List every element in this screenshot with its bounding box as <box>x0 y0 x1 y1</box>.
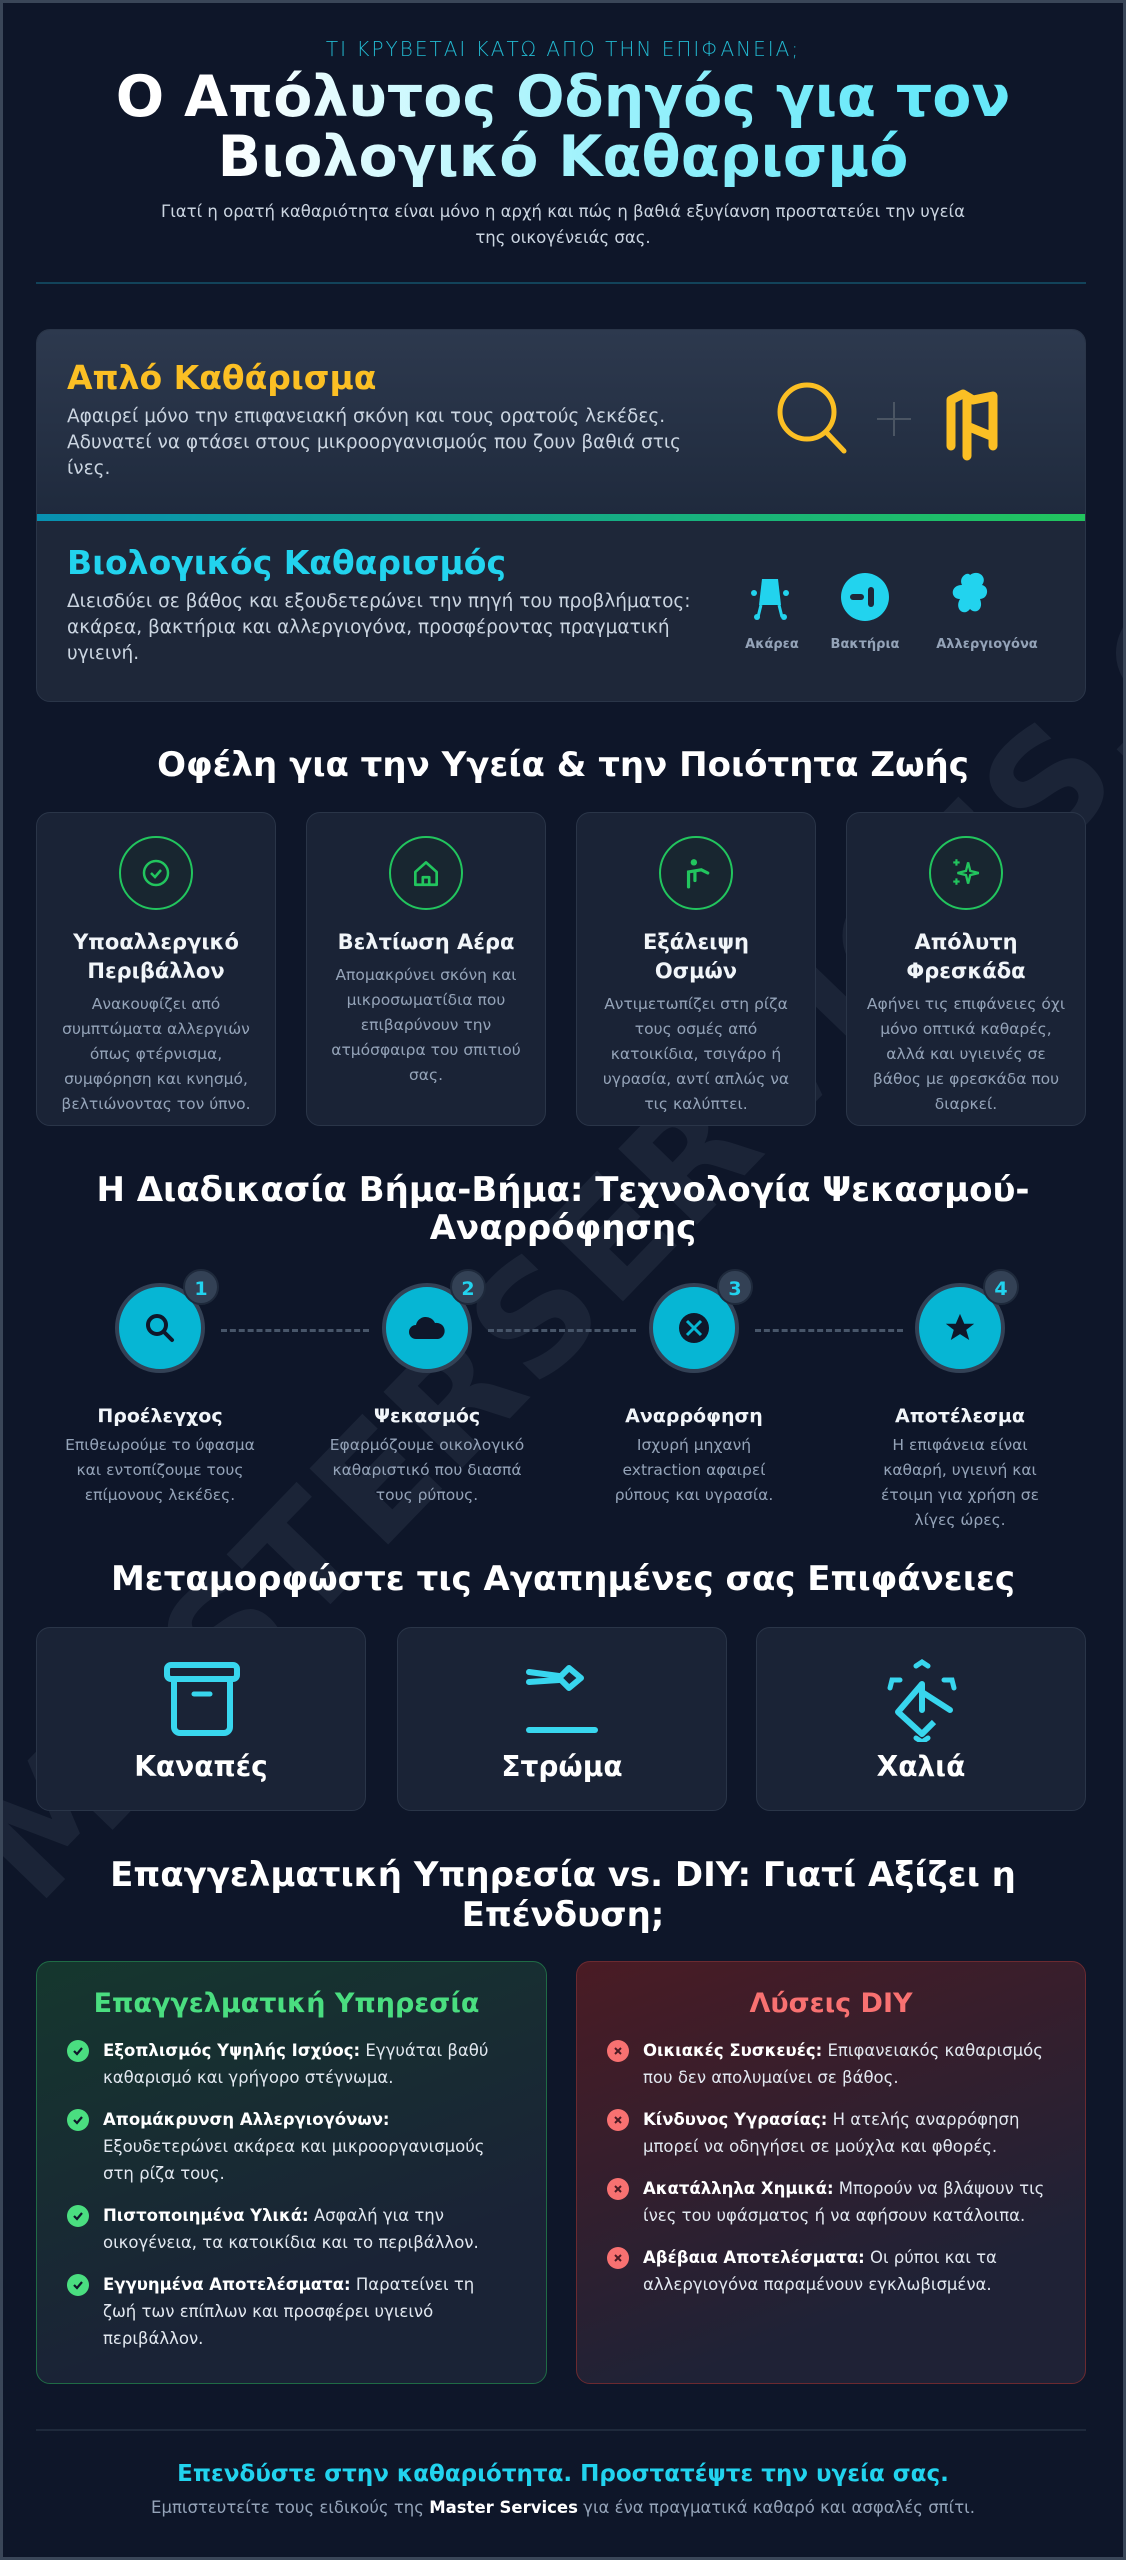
panel: diy: Κίνδυνος Υγρασίας: Η ατελής αναρρόφηση μπορεί να οδηγήσει σε μούχλα και φθορές. <box>643 2110 1019 2156</box>
panel: professional: Εξοπλισμός Υψηλής Ισχύος: Εγγυάται βαθύ καθαρισμό και γρήγορο στέγνωμα. <box>103 2041 488 2087</box>
biological cleaning <box>67 543 1038 664</box>
benefit card 3 <box>576 812 816 1126</box>
footer text: Εμπιστευτείτε τους ειδικούς της Master Services για ένα πραγματικά καθαρό και ασφαλές σπίτι. <box>151 2498 975 2517</box>
icons: magnifier plus tool <box>778 382 998 460</box>
panel: professional: Εξουδετερώνει ακάρεα και μικροοργανισμούς στη ρίζα τους. <box>103 2137 484 2183</box>
benefit card 4: Απόλυτη <box>914 930 1018 954</box>
panel: professional <box>36 1961 547 2384</box>
heading: pro vs diy: Επένδυση; <box>462 1895 664 1935</box>
benefit card 1: Υποαλλεργικό <box>73 930 239 954</box>
icons: pests: Αλλεργιογόνα <box>936 637 1038 652</box>
panel: comparison <box>36 329 1086 702</box>
panel: diy: Αβέβαια Αποτελέσματα: Οι ρύποι και τα αλλεργιογόνα παραμένουν εγκλωβισμένα. <box>643 2248 997 2294</box>
step 3 <box>615 1269 773 1504</box>
benefit card 3: Εξάλειψη <box>643 930 749 954</box>
panel: professional: Πιστοποιημένα Υλικά: Ασφαλή για την οικογένεια, τα κατοικίδια και το περιβάλλον. <box>103 2206 479 2252</box>
text: Αφαιρεί μόνο την επιφανειακή σκόνη και τους ορατούς λεκέδες. Αδυνατεί να φτάσει στους μικροοργανισμούς που ζουν βαθιά στις ίνες. <box>67 406 681 479</box>
heading: process <box>96 1170 1030 1248</box>
panel: professional: Απομάκρυνση Αλλεργιογόνων: <box>103 2110 390 2129</box>
gradient bar <box>37 514 1087 521</box>
surface card: sofa <box>36 1627 366 1811</box>
step 1: Προέλεγχος <box>97 1405 223 1427</box>
step 1: Επιθεωρούμε το ύφασμα και εντοπίζουμε τους επίμονους λεκέδες. <box>65 1436 255 1504</box>
biological cleaning: Βιολογικός Καθαρισμός <box>67 543 506 582</box>
heading: process: Η Διαδικασία Βήμα-Βήμα: Τεχνολογία Ψεκασμού- <box>96 1170 1030 1210</box>
step 1: 1 <box>194 1278 208 1300</box>
benefit card 4 <box>846 812 1086 1126</box>
benefit card 4: Αφήνει τις επιφάνειες όχι μόνο οπτικά καθαρές, αλλά και υγιεινές σε βάθος με φρεσκάδα που διαρκεί. <box>867 995 1065 1113</box>
surface card: mattress: Στρώμα <box>501 1750 623 1783</box>
step 4: 4 <box>994 1278 1008 1300</box>
title <box>3 67 1123 187</box>
benefit card 3: Αντιμετωπίζει στη ρίζα τους οσμές από κατοικίδια, τσιγάρο ή υγρασία, αντί απλώς να τις καλύπτει. <box>603 995 789 1113</box>
simple cleaning <box>37 330 1087 514</box>
step 4: Η επιφάνεια είναι καθαρή, υγιεινή και έτοιμη για χρήση σε λίγες ώρες. <box>881 1436 1039 1529</box>
step 3: Αναρρόφηση <box>625 1405 763 1427</box>
title: Βιολογικό Καθαρισμό <box>218 124 908 190</box>
step 1 <box>65 1269 255 1504</box>
panel: diy: Οικιακές Συσκευές: Επιφανειακός καθαρισμός που δεν απολυμαίνει σε βάθος. <box>643 2041 1043 2087</box>
heading: pro vs diy <box>110 1855 1016 1935</box>
benefit card 3: Οσμών <box>655 959 737 983</box>
step 3: Ισχυρή μηχανή extraction αφαιρεί ρύπους και υγρασία. <box>615 1436 773 1504</box>
heading: Απλό Καθάρισμα <box>67 358 376 397</box>
panel: diy <box>576 1961 1086 2384</box>
icons: pests: Ακάρεα <box>745 637 799 652</box>
panel: professional: Επαγγελματική Υπηρεσία <box>94 1988 479 2019</box>
benefit card 4: Φρεσκάδα <box>906 959 1026 983</box>
surface card: carpet: Χαλιά <box>877 1750 965 1783</box>
step 2 <box>330 1269 524 1504</box>
panel: professional: ζωή των επίπλων και προσφέρει υγιεινό περιβάλλον. <box>103 2302 433 2348</box>
heading: benefits: Οφέλη για την Υγεία & την Ποιότητα Ζωής <box>157 745 969 785</box>
footer headline: Επενδύστε στην καθαριότητα. Προστατέψτε την υγεία σας. <box>177 2461 949 2487</box>
biological cleaning: Διεισδύει σε βάθος και εξουδετερώνει την πηγή του προβλήματος: ακάρεα, βακτήρια και αλλεργιογόνα, προσφέροντας πραγματική υγιεινή. <box>67 591 691 664</box>
surface card: mattress <box>397 1627 727 1811</box>
step 4: Αποτέλεσμα <box>895 1405 1025 1427</box>
surface card: carpet <box>756 1627 1086 1811</box>
benefit card 2 <box>306 812 546 1126</box>
step 4 <box>881 1269 1039 1529</box>
dashed connectors <box>221 1329 369 1332</box>
heading: pro vs diy: Επαγγελματική Υπηρεσία vs. DIY: Γιατί Αξίζει η <box>110 1855 1016 1895</box>
benefit card 1: Περιβάλλον <box>87 959 225 983</box>
benefit card 1 <box>36 812 276 1126</box>
step 3: 3 <box>728 1278 742 1300</box>
benefit card 2: Βελτίωση Αέρα <box>338 930 514 954</box>
title: Ο Απόλυτος Οδηγός για τον <box>116 64 1010 130</box>
kicker: ΤΙ ΚΡΥΒΕΤΑΙ ΚΑΤΩ ΑΠΟ ΤΗΝ ΕΠΙΦΑΝΕΙΑ; <box>326 37 800 61</box>
step 2: Ψεκασμός <box>374 1405 480 1427</box>
step 2: 2 <box>461 1278 475 1300</box>
step 2: Εφαρμόζουμε οικολογικό καθαριστικό που διασπά τους ρύπους. <box>330 1436 524 1504</box>
heading: process: Αναρρόφησης <box>430 1208 696 1248</box>
benefit card 2: Απομακρύνει σκόνη και μικροσωματίδια που επιβαρύνουν την ατμόσφαιρα του σπιτιού σας. <box>331 966 521 1084</box>
icons: pests <box>745 572 1038 652</box>
icons: pests: Βακτήρια <box>831 637 899 652</box>
panel: diy: Λύσεις DIY <box>749 1988 913 2019</box>
panel: diy: Ακατάλληλα Χημικά: Μπορούν να βλάψουν τις ίνες του υφάσματος ή να αφήσουν κατάλοιπα. <box>643 2179 1044 2225</box>
subtitle: Γιατί η ορατή καθαριότητα είναι μόνο η αρχή και πώς η βαθιά εξυγίανση προστατεύει την υγεία της οικογένειάς σας. <box>161 202 965 247</box>
heading: surfaces: Μεταμορφώστε τις Αγαπημένες σας Επιφάνειες <box>111 1559 1015 1599</box>
surface card: sofa: Καναπές <box>134 1750 268 1783</box>
benefit card 1: Ανακουφίζει από συμπτώματα αλλεργιών όπως φτέρνισμα, συμφόρηση και κνησμό, βελτιώνοντας τον ύπνο. <box>61 995 251 1113</box>
panel: professional: Εγγυημένα Αποτελέσματα: Παρατείνει τη <box>103 2275 474 2294</box>
